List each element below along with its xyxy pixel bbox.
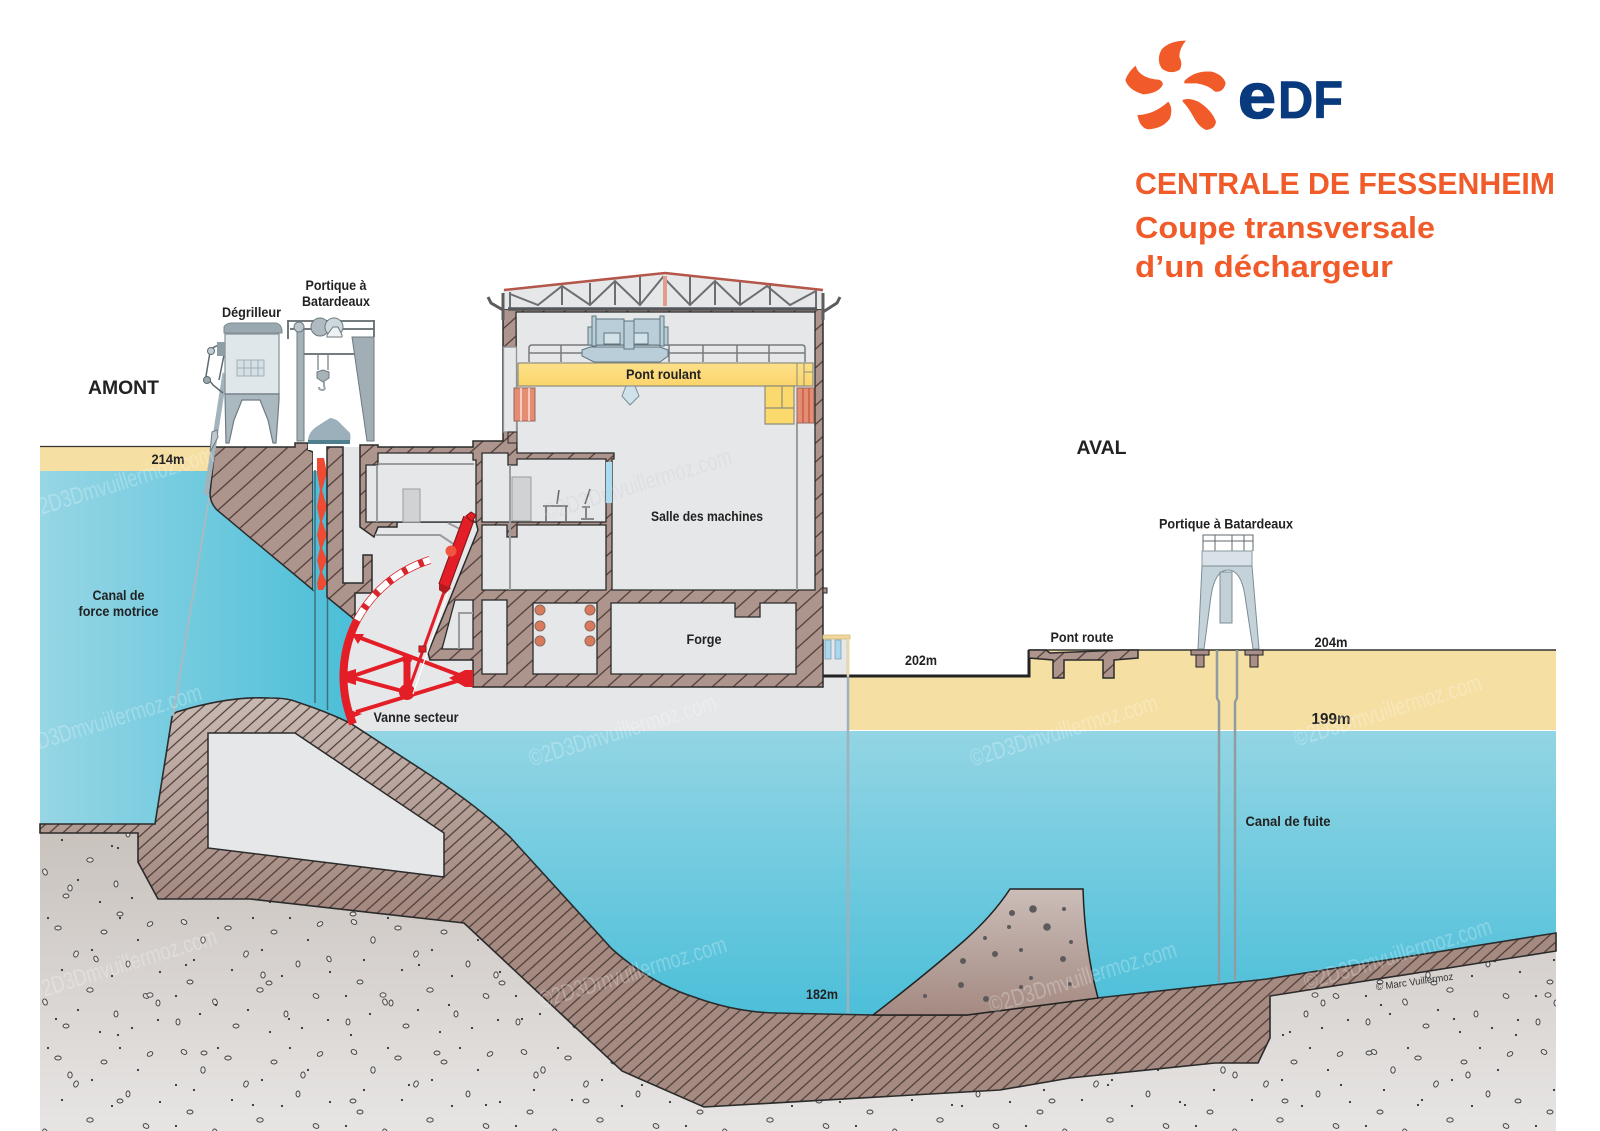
title: CENTRALE DE FESSENHEIM	[1135, 166, 1555, 201]
interior grey void under powerhouse	[342, 447, 848, 732]
subtitle second line: d’un déchargeur	[1135, 249, 1393, 284]
label: 204m: 204m	[1314, 634, 1348, 650]
label: canal de force motrice: Canal de	[92, 587, 145, 603]
label: dégrilleur: Dégrilleur	[222, 304, 281, 320]
powerhouse concrete structure	[360, 309, 823, 687]
room: control room	[482, 453, 606, 522]
watermarks: ©2D3Dmvuillermoz.com	[1301, 913, 1495, 996]
vertical gauge lines	[173, 492, 1237, 1013]
subtitle: Coupe transversale	[1135, 210, 1435, 245]
downstream bank with road	[823, 650, 1556, 730]
watermarks: ©2D3Dmvuillermoz.com	[541, 443, 735, 526]
label: pont roulant: Pont roulant	[626, 366, 701, 382]
logo: EDF	[1125, 41, 1343, 132]
room: basement with valves	[533, 603, 597, 674]
crane hook block	[622, 386, 639, 405]
crane beam	[518, 363, 813, 386]
logo wordmark: e	[1238, 60, 1276, 132]
label: aval: AVAL	[1076, 438, 1127, 459]
valves	[535, 605, 595, 646]
label: vanne secteur: Vanne secteur	[374, 709, 459, 725]
ground: gravel soil	[40, 833, 1556, 1131]
label: portique à batardeaux upstream: Portique à	[306, 277, 367, 293]
credit: © Marc Vuillermoz	[1375, 972, 1454, 993]
hook	[318, 355, 328, 370]
label: 182m: 182m	[806, 986, 838, 1002]
small pumphouse	[823, 635, 850, 676]
upstream water: canal de force motrice	[40, 471, 356, 835]
crane end carriage	[765, 386, 794, 424]
portique à batardeaux upstream	[288, 318, 374, 444]
label: 202m: 202m	[905, 652, 937, 668]
red rail supports	[514, 388, 535, 421]
logo: EDF: DF	[1278, 71, 1343, 130]
desk and chair	[543, 489, 594, 521]
downstream water: canal de fuite	[356, 731, 1556, 1031]
gutters	[488, 293, 840, 320]
hydraulic rod	[408, 592, 444, 692]
gallery inside spillway	[208, 733, 444, 877]
crane rails	[529, 345, 805, 362]
label: salle des machines: Salle des machines	[651, 508, 763, 524]
room: small technical room	[442, 600, 473, 649]
stoplog lifting beam	[308, 418, 350, 441]
watermarks: ©2D3Dmvuillermoz.com	[23, 441, 217, 524]
overhead crane: pont roulant	[514, 316, 814, 424]
label: canal de force motrice: force motrice	[78, 603, 159, 619]
shaft wall	[327, 447, 372, 620]
room: forge	[611, 603, 796, 674]
watermarks: ©2D3Dmvuillermoz.com	[986, 936, 1180, 1019]
gate skin	[343, 620, 357, 724]
road bridge: pont route	[1029, 650, 1138, 678]
label: forge: Forge	[686, 631, 722, 647]
downstream gantry: portique à batardeaux	[1191, 535, 1263, 667]
upstream bank	[40, 446, 216, 471]
watermarks: ©2D3Dmvuillermoz.com	[11, 679, 205, 762]
room: upper left gallery	[366, 453, 476, 522]
concrete spillway and apron	[40, 698, 1556, 1107]
gate arms	[350, 637, 467, 712]
watermarks: ©2D3Dmvuillermoz.com	[26, 923, 220, 1006]
label: amont: AMONT	[88, 378, 159, 399]
room fittings	[375, 347, 827, 649]
logo swirl	[1125, 41, 1226, 130]
label: portique à batardeaux downstream: Portique à Batardeaux	[1159, 516, 1293, 532]
powerhouse rooms	[366, 312, 815, 674]
watermarks	[11, 441, 1495, 1019]
rock sill	[873, 889, 1098, 1015]
watermarks: ©2D3Dmvuillermoz.com	[967, 689, 1161, 772]
stoplog slot and shaft	[308, 440, 333, 710]
room: salle des machines	[516, 312, 815, 590]
sector gate: vanne secteur	[343, 512, 476, 724]
title block	[1135, 166, 1555, 284]
crane trolley	[582, 316, 668, 362]
watermarks: ©2D3Dmvuillermoz.com	[1291, 669, 1485, 752]
label: 199m: 199m	[1312, 711, 1350, 728]
roof truss	[488, 273, 840, 320]
label: portique à batardeaux upstream: Batardeaux	[302, 293, 370, 309]
watermarks: ©2D3Dmvuillermoz.com	[536, 931, 730, 1014]
upstream headwall	[210, 443, 313, 590]
room: lower room	[482, 525, 606, 590]
room: basement left	[482, 600, 507, 674]
label: pont route: Pont route	[1050, 629, 1114, 645]
label: canal de fuite: Canal de fuite	[1246, 813, 1331, 829]
watermarks: ©2D3Dmvuillermoz.com	[526, 689, 720, 772]
hydraulic cylinder	[444, 518, 469, 586]
dégrilleur machine	[204, 323, 282, 495]
label: 214m: 214m	[152, 451, 184, 467]
